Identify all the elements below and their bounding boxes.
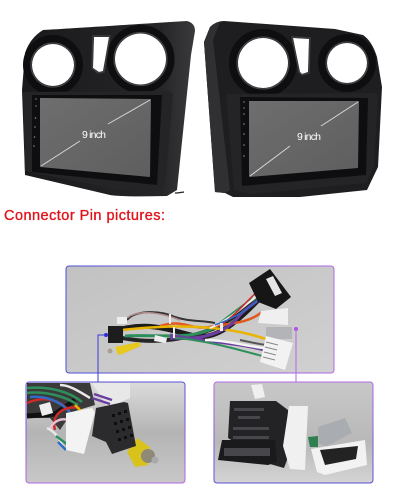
small coloured wires <box>308 436 318 447</box>
white cable ties <box>169 314 223 338</box>
fascia body <box>204 21 382 197</box>
small white connector <box>251 384 265 399</box>
yellow RCA plug <box>127 438 158 467</box>
white wire label <box>154 335 167 343</box>
small black connector <box>108 326 123 343</box>
left gauge ring <box>233 33 293 93</box>
black connector <box>92 402 136 454</box>
bezel <box>240 97 368 186</box>
touchscreen <box>40 98 151 177</box>
callout dot: left detail <box>104 333 108 337</box>
white connector top <box>258 308 288 325</box>
connector line: left <box>98 335 106 382</box>
wire bundle <box>122 288 268 356</box>
panel frame <box>214 382 373 483</box>
grey connector <box>318 418 352 446</box>
white connector <box>66 408 95 454</box>
panel: left connector close-up <box>26 382 185 483</box>
black connector upper <box>228 401 288 468</box>
dark wire mass <box>27 383 95 430</box>
right gauge ring <box>322 38 372 88</box>
button column <box>243 101 245 157</box>
connector latch marks <box>263 342 278 360</box>
centre vent outline <box>292 37 310 75</box>
connector label <box>266 276 282 296</box>
panel: right connector close-up <box>214 382 373 483</box>
white flat connector <box>311 440 367 475</box>
button column <box>33 98 37 147</box>
heading: Connector Pin pictures: <box>4 208 165 224</box>
touchscreen <box>249 101 359 177</box>
pin rows <box>224 408 270 456</box>
left gauge ring <box>27 39 79 91</box>
panel: full wiring harness photo <box>66 266 334 382</box>
black connector lower <box>218 440 277 465</box>
panel frame <box>66 266 334 373</box>
panel frame <box>26 382 185 483</box>
panel: right 9 inch radio fascia <box>204 21 382 197</box>
lower trim <box>226 93 378 194</box>
white tall connector <box>283 406 308 470</box>
diagonal arrow <box>250 102 358 176</box>
small white connector <box>117 317 127 324</box>
black main connector <box>249 269 291 309</box>
fascia body <box>22 21 195 196</box>
centre vent outline <box>92 36 110 73</box>
right gauge ring <box>110 29 170 89</box>
white connector bottom <box>260 336 293 370</box>
yellow RCA plug <box>108 342 141 355</box>
background white connector <box>92 383 130 408</box>
lower trim <box>23 91 173 190</box>
bezel <box>32 95 162 185</box>
diagonal arrow <box>41 100 150 166</box>
size label: 9 inch <box>297 131 321 143</box>
left edge highlight <box>204 22 230 193</box>
connector pin holes <box>112 410 133 441</box>
white wire label <box>39 402 53 416</box>
connector line: right <box>295 329 297 382</box>
wires <box>27 385 112 450</box>
callout dot: right detail <box>294 327 298 331</box>
grey connector <box>266 327 292 339</box>
size label: 9 inch <box>82 129 106 141</box>
panel: left 9 inch radio fascia <box>22 21 195 196</box>
connector opening <box>320 446 358 465</box>
mounting tab <box>175 192 184 193</box>
